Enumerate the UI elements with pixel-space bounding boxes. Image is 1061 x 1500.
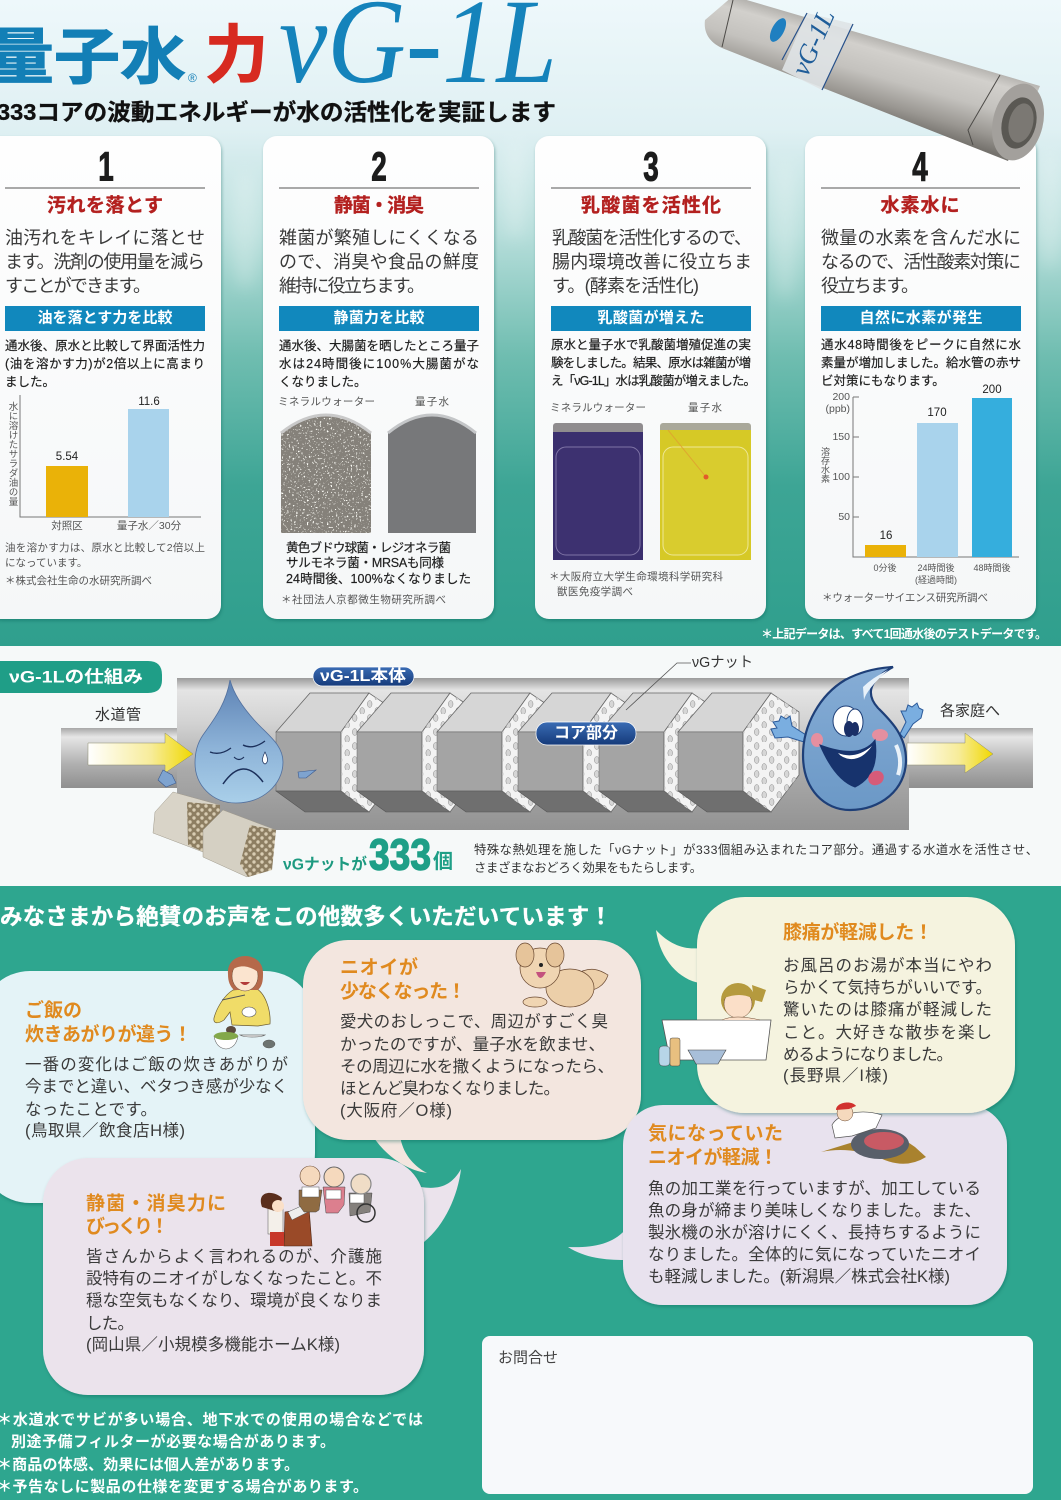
bar chart: oil dissolving: 対照区 — [51, 519, 83, 532]
body text: ので、消臭や食品の鮮度 — [279, 252, 479, 272]
explanation: 水は24時間後に100%大腸菌がな — [279, 356, 479, 371]
body: も軽減しました。(新潟県／株式会社K様) — [648, 1267, 950, 1286]
icon: bath — [659, 983, 771, 1066]
body — [648, 1179, 981, 1286]
bar chart: dissolved hydrogen: 200 — [982, 384, 1002, 396]
text: notes: ＊予告なしに製品の仕様を変更する場合があります。 — [0, 1478, 368, 1496]
caption — [286, 540, 471, 586]
heading: 少なくなった！ — [340, 980, 466, 1002]
number 2: 2 — [371, 144, 387, 190]
note: になっています。 — [5, 557, 87, 569]
subtitle: 333コアの波動エネルギーが水の活性化を実証します — [0, 99, 556, 125]
bar chart: oil dissolving: 量子水／30分 — [117, 520, 182, 532]
testimonial: dog odour — [303, 940, 641, 1173]
note: ＊大阪府立大学生命環境科学研究科 — [549, 570, 724, 583]
photo: purple culture — [553, 423, 643, 560]
callout: core pill — [536, 722, 636, 745]
body: した。 — [86, 1314, 134, 1333]
body — [340, 1012, 614, 1120]
product: cylinder — [705, 0, 1052, 166]
body text: す。(酵素を活性化) — [552, 276, 699, 296]
icon: fish worker — [821, 1103, 926, 1164]
caption: サルモネラ菌・MRSAも同様 — [286, 555, 444, 570]
callout: 333 nuts — [283, 830, 453, 880]
text: notes: ＊水道水でサビが多い場合、地下水での使用の場合などでは — [0, 1410, 423, 1428]
body text: 油汚れをキレイに落とせ — [5, 228, 205, 248]
note — [549, 570, 724, 598]
explanation: (油を溶かす力)が2倍以上に高まり — [5, 356, 205, 371]
body text: 維持に役立ちます。 — [279, 276, 425, 296]
explanation: 通水後、原水と比較して界面活性力 — [5, 339, 205, 353]
panel: contact — [482, 1336, 1033, 1494]
body — [86, 1247, 382, 1354]
body: 穏な空気もなくなり、環境が良くなりま — [86, 1291, 382, 1310]
photo labels — [550, 402, 722, 414]
text: notes: ＊商品の体感、効果には個人差があります。 — [0, 1456, 299, 1474]
photo labels: ミネラルウォーター — [550, 402, 646, 414]
body: なったことです。 — [25, 1100, 157, 1119]
photo: quantum water dish — [388, 415, 476, 533]
body text — [821, 228, 1021, 296]
body: ほとんど臭わなくなりました。 — [340, 1079, 560, 1098]
body: なりました。全体的に気になっていたニオイ — [648, 1245, 981, 1264]
explanation: え「νG-1L」水は乳酸菌が増えました。 — [551, 373, 756, 388]
testimonial: fish processing — [568, 1105, 1007, 1305]
body text — [279, 227, 479, 296]
callout: body pill — [313, 667, 414, 686]
heading: ニオイが軽減！ — [648, 1146, 778, 1168]
background: testimonials — [0, 886, 1061, 1500]
body: 製氷機の氷が溶けにくく、長持ちするように — [648, 1223, 981, 1242]
bar chart: dissolved hydrogen: 200 — [832, 391, 850, 403]
subheading bar — [551, 306, 751, 331]
caption: 黄色ブドウ球菌・レジオネラ菌 — [286, 540, 451, 555]
bar chart: dissolved hydrogen: 170 — [927, 407, 947, 419]
bar chart: dissolved hydrogen — [820, 384, 1019, 585]
body: 愛犬のおしっこで、周辺がすごく臭 — [340, 1012, 608, 1031]
callout: 333 nuts: νGナットが — [283, 854, 367, 874]
heading: 静菌・消臭力に — [86, 1192, 226, 1214]
body: 皆さんからよく言われるのが、介護施 — [86, 1247, 382, 1266]
body text: 乳酸菌を活性化するので、 — [552, 228, 752, 248]
panel: card 2 — [263, 136, 494, 619]
body text: 腸内環境改善に役立ちま — [552, 252, 752, 272]
photo: yellow culture — [660, 423, 751, 560]
explanation: 験をしました。結果、原水は雑菌が増 — [551, 355, 751, 370]
core blocks — [276, 693, 799, 812]
body text: なるので、活性酸素対策に — [821, 252, 1021, 272]
body: (鳥取県／飲食店H様) — [25, 1121, 185, 1140]
subheading bar: 自然に水素が発生 — [860, 308, 982, 326]
explanation: 素量が増加しました。給水管の赤サ — [821, 355, 1021, 370]
panel: mechanism — [0, 646, 1061, 886]
icon: happy water drop — [771, 667, 923, 810]
caption: 24時間後、100%なくなりました — [286, 572, 471, 586]
photo: nut samples — [153, 792, 276, 877]
body: 驚いたのは膝痛が軽減した — [783, 1000, 992, 1019]
heading: ご飯の — [25, 998, 82, 1022]
arrow: inflow — [88, 733, 193, 773]
bar chart: dissolved hydrogen: (ppb) — [825, 403, 850, 415]
bar chart: dissolved hydrogen: 48時間後 — [973, 562, 1011, 573]
bar chart: dissolved hydrogen: 16 — [880, 530, 892, 542]
explanation: くなりました。 — [279, 375, 367, 389]
product: cylinder: νG-1L — [785, 5, 841, 80]
bar chart: oil dissolving: 水に溶けたサラダ油の量 — [6, 401, 18, 506]
footnote: test data: ＊上記データは、すべて1回通水後のテストデータです。 — [761, 626, 1047, 641]
heading: 膝痛が軽減した！ — [783, 920, 933, 944]
bar chart: dissolved hydrogen: 溶存水素 — [820, 446, 830, 484]
subheading bar — [279, 306, 479, 331]
bar chart: dissolved hydrogen: 100 — [832, 471, 850, 483]
label: mechanism heading — [0, 661, 162, 693]
body — [25, 1055, 288, 1140]
label: to homes: 各家庭へ — [940, 702, 1000, 720]
body: 一番の変化はご飯の炊きあがりが — [25, 1055, 288, 1074]
body text: 役立ちます。 — [821, 276, 919, 296]
heading: 汚れを落とす: 汚れを落とす — [47, 194, 163, 216]
testimonial: rice — [0, 956, 315, 1203]
heading: びっくり！ — [86, 1216, 169, 1238]
explanation — [551, 337, 756, 388]
text: explanation — [474, 842, 1038, 875]
body: 魚の加工業を行っていますが、加工している — [648, 1179, 981, 1198]
note: 獣医免疫学調べ — [557, 585, 633, 598]
number 3: 3 — [643, 144, 659, 190]
bar chart: oil dissolving — [6, 395, 201, 532]
heading — [340, 956, 466, 1002]
title — [0, 0, 557, 109]
label: お問合せ — [498, 1350, 558, 1366]
bar chart: dissolved hydrogen: 24時間後 — [917, 562, 955, 573]
subheading bar — [821, 306, 1021, 331]
explanation — [5, 339, 205, 389]
subheading bar: 油を落とす力を比較 — [38, 308, 172, 326]
explanation: 通水48時間後をピークに自然に水 — [821, 337, 1021, 352]
explanation — [821, 337, 1021, 388]
heading: 気になっていた — [648, 1122, 783, 1144]
body text: 雑菌が繁殖しにくくなる — [279, 227, 479, 248]
panel: card 4 — [805, 136, 1036, 619]
label: tap pipe: 水道管 — [95, 706, 141, 724]
testimonial: care home — [43, 1158, 461, 1395]
body: こと。大好きな散歩を楽し — [783, 1023, 992, 1042]
body: めるようになりました。 — [783, 1045, 953, 1064]
body: 今までと違い、ベタつき感が少なく — [25, 1077, 288, 1096]
callout: nut leader — [626, 655, 753, 710]
explanation: ビ対策にもなります。 — [821, 373, 945, 388]
explanation: 原水と量子水で乳酸菌増殖促進の実 — [551, 337, 751, 352]
photo labels: 量子水 — [688, 402, 722, 414]
text: explanation: さまざまなおどろく効果をもたらします。 — [474, 860, 702, 875]
label: mechanism heading: νG-1Lの仕組み — [9, 668, 143, 686]
explanation: 通水後、大腸菌を晒したところ量子 — [279, 339, 479, 353]
body: らかくて気持ちがいいです。 — [783, 978, 992, 997]
bar chart: dissolved hydrogen: 150 — [832, 431, 850, 443]
testimonial: knee pain — [656, 897, 1015, 1164]
top background — [0, 0, 1061, 648]
pipe — [61, 678, 1033, 830]
number 4: 4 — [912, 144, 928, 190]
title: ® — [188, 71, 197, 85]
body text — [5, 228, 205, 296]
bar chart: oil dissolving: 11.6 — [138, 396, 160, 408]
icon: dog — [516, 943, 608, 1007]
callout: 333 nuts: 個 — [433, 850, 453, 873]
callout: body pill: νG-1L本体 — [320, 667, 406, 685]
callout: 333 nuts: 333 — [369, 830, 431, 880]
note: ＊社団法人京都微生物研究所調べ — [281, 593, 446, 606]
body: (岡山県／小規模多機能ホームK様) — [86, 1335, 340, 1354]
body: かったのですが、量子水を飲ませ、 — [340, 1035, 605, 1054]
icon: woman eating — [214, 956, 275, 1049]
body: 魚の身が締まり美味しくなりました。また、 — [648, 1201, 981, 1220]
bar chart: dissolved hydrogen: (経過時間) — [915, 574, 957, 585]
bar chart: oil dissolving: 5.54 — [56, 451, 79, 463]
heading: testimonials: みなさまから絶賛のお声をこの他数多くいただいています！ — [0, 904, 612, 930]
icon: sad water drop — [158, 680, 316, 803]
body — [783, 956, 992, 1085]
panel: card 3 — [535, 136, 766, 619]
heading: 乳酸菌を活性化: 乳酸菌を活性化 — [581, 194, 721, 216]
body: (長野県／I様) — [783, 1066, 888, 1085]
text: notes: 別途予備フィルターが必要な場合があります。 — [11, 1432, 335, 1450]
body: 設特有のニオイがしなくなったこと。不 — [86, 1269, 382, 1288]
photo labels — [278, 396, 450, 408]
body text: ます。洗剤の使用量を減ら — [5, 252, 205, 272]
panel: card 1 — [0, 136, 221, 619]
note — [5, 541, 205, 587]
subheading bar: 静菌力を比較 — [334, 308, 424, 326]
body: その周辺に水を撒くようになったら、 — [340, 1057, 614, 1076]
note: ＊ウォーターサイエンス研究所調べ — [822, 591, 988, 604]
heading: 炊きあがりが違う！ — [25, 1022, 192, 1046]
photo labels: ミネラルウォーター — [278, 396, 375, 408]
note: ＊株式会社生命の水研究所調べ — [5, 574, 152, 587]
explanation — [279, 339, 479, 389]
callout: core pill: コア部分 — [554, 724, 618, 742]
heading — [86, 1192, 226, 1238]
number 1: 1 — [98, 144, 114, 190]
heading: 水素水に: 水素水に — [880, 194, 960, 216]
note: 油を溶かす力は、原水と比較して2倍以上 — [5, 541, 205, 554]
bar chart: dissolved hydrogen: 50 — [838, 511, 850, 523]
body: (大阪府／O様) — [340, 1101, 452, 1120]
body: お風呂のお湯が本当にやわ — [783, 956, 992, 975]
title: 力 — [205, 21, 268, 91]
heading: 静菌・消臭: 静菌・消臭 — [334, 194, 424, 216]
subheading bar: 乳酸菌が増えた — [598, 308, 704, 326]
photo labels: 量子水 — [415, 396, 450, 408]
explanation: ました。 — [5, 375, 55, 389]
arrow: outflow — [907, 733, 993, 773]
heading — [25, 998, 192, 1046]
body text: 微量の水素を含んだ水に — [821, 228, 1021, 248]
text: explanation: 特殊な熱処理を施した「νGナット」が333個組み込まれたコア部分。通過する水道水を活性させ、 — [474, 842, 1038, 857]
icon: seniors and pianist — [261, 1166, 375, 1246]
photo: mineral water dish — [281, 415, 371, 533]
heading: ニオイが — [340, 956, 418, 978]
callout: nut leader: νGナット — [692, 655, 753, 671]
body text — [552, 228, 752, 296]
heading — [648, 1122, 783, 1168]
subheading bar — [5, 306, 205, 331]
text: notes — [0, 1410, 423, 1496]
bar chart: dissolved hydrogen: 0分後 — [873, 562, 897, 573]
body text: すことができます。 — [5, 276, 151, 296]
